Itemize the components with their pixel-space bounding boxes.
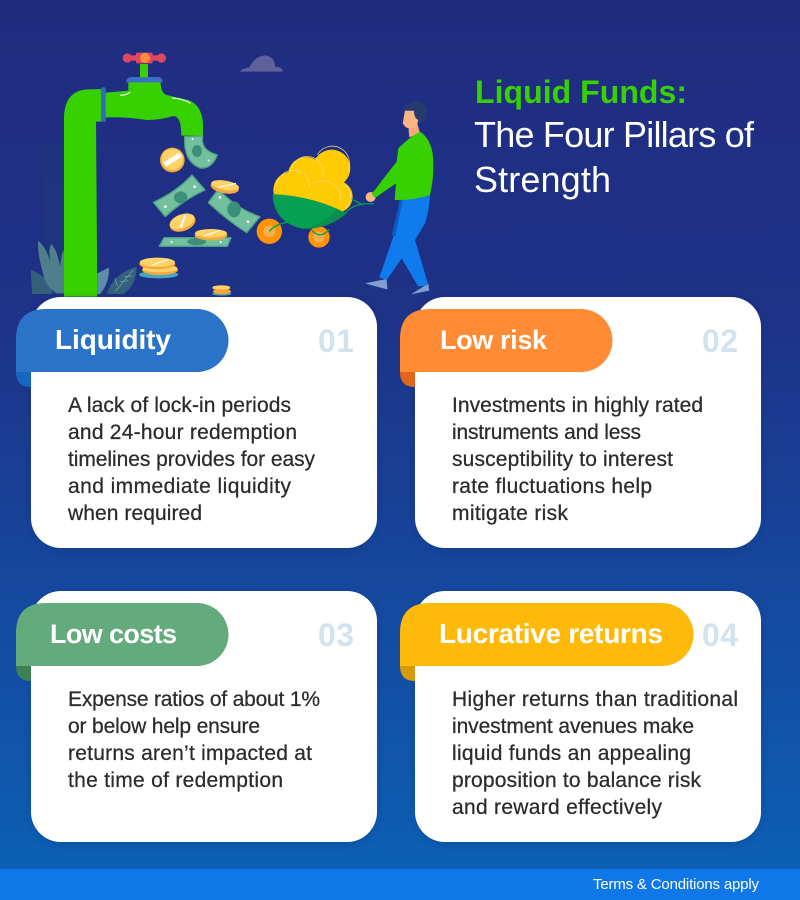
panel: low costs: Expense ratios of about 1% (68, 688, 320, 711)
panel: lucrative returns: investment avenues make (452, 715, 694, 738)
panel: lucrative returns: liquid funds an appealing (452, 742, 691, 765)
icon: tap handle (123, 53, 166, 63)
illustration: faucet, money and coins (31, 53, 260, 297)
icon: man pushing (365, 101, 433, 294)
icon: coin stacks (139, 258, 231, 296)
panel: low costs (16, 591, 377, 842)
panel: low risk: 02 (702, 323, 738, 359)
panel: lucrative returns (400, 591, 761, 842)
panel: low risk: rate fluctuations help (452, 475, 652, 498)
panel: low risk (400, 297, 761, 548)
panel: lucrative returns: Lucrative returns (439, 618, 663, 649)
panel: low costs: the time of redemption (68, 769, 283, 792)
icon: banknotes (153, 136, 260, 246)
icon: banknote centres (164, 138, 249, 245)
title: Liquid Funds: (475, 74, 687, 110)
panel: low risk: mitigate risk (452, 502, 568, 525)
icon: wheelbarrow full of coins (257, 146, 374, 248)
footer bar (0, 869, 800, 900)
footer bar: Terms & Conditions apply (593, 876, 760, 893)
panel: liquidity: when required (67, 502, 202, 525)
panel: liquidity: and immediate liquidity (68, 475, 292, 498)
panel: lucrative returns: Higher returns than traditional (452, 688, 738, 711)
panel: low risk: susceptibility to interest (452, 448, 673, 471)
title (474, 74, 755, 200)
panel: liquidity: timelines provides for easy (68, 448, 316, 471)
panel: low costs: returns aren’t impacted at (68, 742, 312, 765)
icon: cloud (240, 55, 283, 72)
title: The Four Pillars of (474, 114, 755, 155)
panel: liquidity (16, 297, 377, 548)
illustration: cloud, wheelbarrow and man (240, 55, 433, 294)
panel: low risk: Low risk (440, 325, 548, 355)
panel: liquidity: A lack of lock-in periods (68, 394, 291, 417)
plants behind the pipe (31, 140, 137, 294)
title: Strength (474, 159, 611, 200)
panel: liquidity: and 24-hour redemption (68, 421, 297, 444)
panel: low risk: instruments and less (452, 421, 641, 444)
panel: lucrative returns: and reward effectively (452, 796, 662, 819)
panel: low risk: Investments in highly rated (452, 394, 703, 417)
icon: falling coins (160, 148, 240, 240)
panel: low costs: 03 (318, 617, 354, 653)
pipe (64, 64, 203, 297)
panel: low costs: or below help ensure (68, 715, 260, 738)
panel: liquidity: Liquidity (55, 324, 171, 355)
panel: lucrative returns: proposition to balance risk (452, 769, 702, 792)
panel: low costs: Low costs (50, 619, 177, 649)
panel: liquidity: 01 (318, 323, 354, 359)
panel: lucrative returns: 04 (702, 617, 738, 653)
